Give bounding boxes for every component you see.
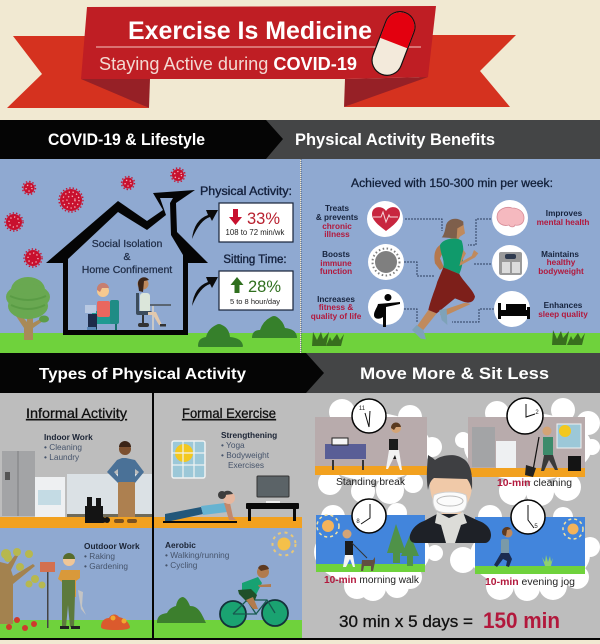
person doing plank [163, 491, 237, 523]
house caption [82, 238, 172, 276]
clock: 2: 2 [535, 410, 539, 416]
section header: Physical Activity Benefits: Physical Activity Benefits [295, 131, 495, 149]
scene: evening jog [475, 517, 585, 574]
clock: 11: 11 [359, 406, 366, 412]
leaf pile [101, 614, 130, 630]
man standing [107, 441, 144, 523]
icon circles [367, 200, 530, 327]
title: Exercise Is Medicine [128, 17, 372, 45]
benefit labels: healthy [547, 258, 576, 267]
divider [152, 393, 154, 638]
sitting time stat: 5 to 8 hour/day [230, 297, 280, 306]
benefit labels: mental health [537, 218, 589, 227]
benefit labels: fitness & [319, 303, 353, 312]
clock: 5 [511, 500, 545, 534]
indoor work text: • Laundry [44, 452, 80, 462]
icon: brain [497, 207, 524, 227]
benefit labels: function [320, 267, 352, 276]
clock: 5: 5 [534, 524, 538, 530]
aerobic text: Aerobic [165, 540, 196, 550]
gardener [40, 553, 86, 629]
panel: physical activity benefits [301, 159, 600, 353]
window [172, 441, 205, 478]
icon: house outline [46, 190, 208, 335]
clock: 2 [507, 398, 543, 434]
section header: Types of Physical Activity: Types of Physical Activity [39, 366, 246, 383]
total line: 30 min x 5 days = [339, 612, 473, 631]
TV on table [246, 476, 299, 521]
icon: grass [312, 330, 585, 346]
panel: formal exercise [154, 393, 302, 638]
heading: informal: Informal Activity [26, 405, 127, 421]
panel: COVID-19 and lifestyle [0, 159, 300, 353]
icon: fitness pose [374, 294, 400, 327]
scene: standing break [315, 417, 427, 475]
strengthening text: Strengthening [221, 430, 277, 440]
benefit labels: quality of life [311, 312, 362, 321]
sitting time stat: 28% [248, 278, 281, 296]
sitting time stat [219, 254, 293, 310]
icon: virus [372, 248, 400, 276]
benefit labels [311, 204, 589, 321]
indoor work text: Indoor Work [44, 432, 93, 442]
benefits heading: Achieved with 150-300 min per week: [351, 178, 553, 190]
physical activity stat: Physical Activity: [200, 186, 292, 198]
icon: scale [499, 252, 522, 275]
section header: COVID-19 & Lifestyle [0, 120, 600, 159]
person on armchair [85, 283, 119, 330]
person at desk [136, 277, 171, 330]
section header: Move More and Sit Less: Move More & Sit Less [360, 365, 549, 383]
physical activity stat: 33% [247, 210, 280, 228]
indoor work text [44, 432, 93, 462]
outdoor work text [84, 541, 140, 571]
bottom rule [0, 638, 600, 640]
connector lines [404, 219, 494, 323]
heading: formal: Formal Exercise [182, 405, 276, 421]
subtitle: Staying Active during COVID-19 [99, 54, 357, 74]
section header: COVID-19 & Lifestyle: COVID-19 & Lifestyle [48, 131, 205, 149]
aerobic text [165, 540, 230, 570]
outdoor work text: • Gardening [84, 561, 128, 571]
benefit labels: bodyweight [538, 267, 584, 276]
icon: sun [272, 532, 296, 556]
icon: bush [157, 597, 206, 623]
total value: 150 min [483, 608, 560, 633]
benefit labels: chronic [322, 222, 352, 231]
benefit labels: Maintains [541, 250, 579, 259]
benefit labels: Increases [317, 295, 355, 304]
icon: bed [498, 303, 530, 319]
physical activity stat: 108 to 72 min/wk [226, 228, 285, 237]
outdoor work text: • Raking [84, 551, 115, 561]
caption: morning walk: 10-min morning walk [324, 575, 420, 586]
physical activity stat [200, 186, 293, 242]
scene: cleaning [468, 417, 585, 477]
strengthening text: • Yoga [221, 440, 245, 450]
house caption: Social Isolation [92, 238, 162, 250]
cyclist [220, 565, 288, 627]
clouds [314, 398, 600, 601]
aerobic text: • Walking/running [165, 550, 230, 560]
benefit labels: & prevents [316, 213, 359, 222]
runner [412, 219, 478, 339]
caption: cleaning: 10-min cleaning [497, 478, 572, 489]
strengthening text [221, 430, 277, 470]
arrow [192, 277, 218, 306]
icon: pill [368, 7, 419, 80]
aerobic text: • Cycling [165, 560, 198, 570]
strengthening text: Exercises [228, 460, 264, 470]
benefit labels: Enhances [544, 301, 583, 310]
caption: evening jog: 10-min evening jog [485, 577, 575, 588]
tree with yellow leaves [0, 548, 46, 631]
masked man [410, 455, 491, 543]
icon: bushes [198, 316, 297, 347]
icon: heart [372, 207, 400, 231]
kitchen appliances [2, 451, 152, 517]
arrow [192, 210, 218, 239]
indoor work text: • Cleaning [44, 442, 82, 452]
outdoor work text: Outdoor Work [84, 541, 140, 551]
house caption: Home Confinement [82, 264, 172, 276]
section header: Types of Physical Activity [0, 353, 600, 393]
cleaning supplies [85, 497, 110, 523]
caption: standing break: Standing break [336, 477, 406, 488]
benefit labels: sleep quality [538, 310, 588, 319]
panel: move more and sit less [302, 393, 600, 638]
benefit labels: illness [324, 230, 350, 239]
title banner [7, 6, 516, 108]
clock: 8: 8 [356, 519, 360, 525]
benefit labels: Improves [546, 209, 583, 218]
sitting time stat: Sitting Time: [223, 254, 287, 266]
strengthening text: • Bodyweight [221, 450, 270, 460]
clock: 8 [352, 499, 386, 533]
house caption: & [123, 251, 131, 263]
scene: morning walk [316, 515, 425, 572]
benefit labels: Boosts [322, 250, 350, 259]
benefit labels: Treats [325, 204, 350, 213]
clock: 11 [352, 399, 386, 433]
icon: tree [6, 277, 50, 340]
benefit labels: immune [320, 259, 352, 268]
panel: informal activity [0, 393, 152, 638]
icon: virus particles [5, 168, 185, 267]
